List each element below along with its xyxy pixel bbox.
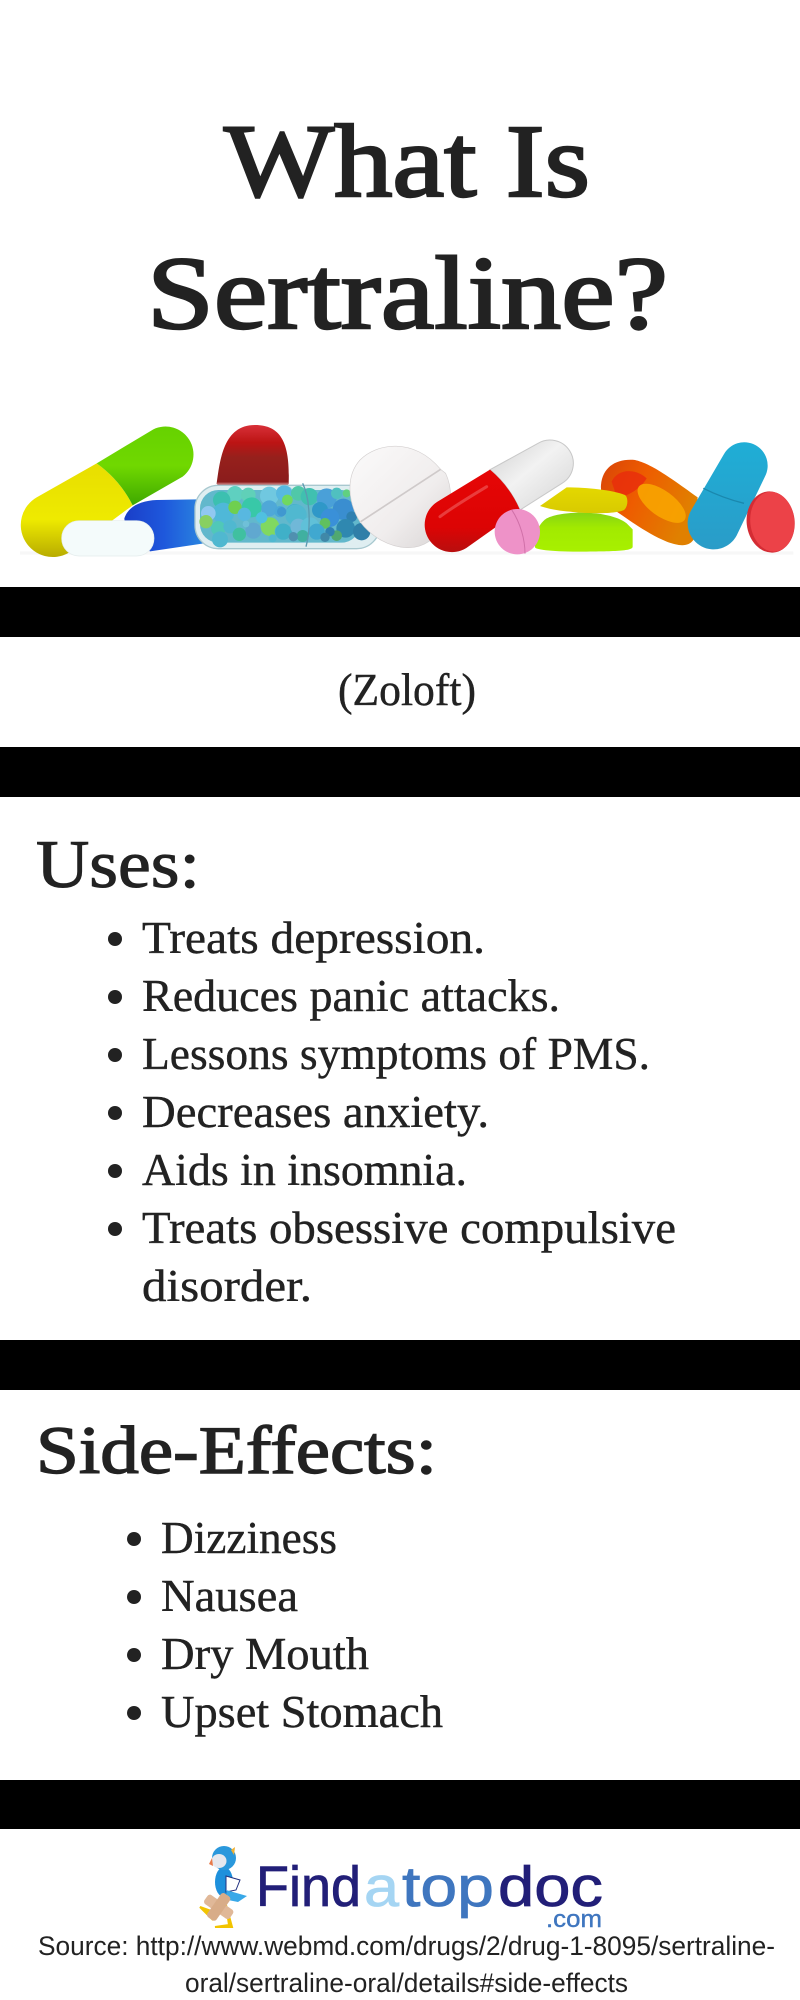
wordmark: doc (498, 1855, 603, 1919)
side effects list: Upset Stomach (161, 1687, 443, 1737)
illustration: row of colourful pills (20, 425, 798, 557)
glass capsule with beads (195, 483, 380, 549)
pink tablet (495, 509, 540, 554)
source text (38, 1931, 775, 1998)
ground shadow (20, 551, 793, 555)
black band 1 (0, 587, 800, 637)
uses list (108, 913, 676, 1311)
black band 3 (0, 1340, 800, 1390)
side effects list: Dizziness (161, 1513, 337, 1563)
source text: oral/sertraline-oral/details#side-effects (185, 1968, 628, 1998)
red tablet (744, 489, 798, 555)
heading: side effects: Side-Effects: (36, 1412, 437, 1488)
panel: uses (36, 826, 676, 1311)
black band 4 (0, 1780, 800, 1829)
red and white capsule (425, 440, 573, 552)
subtitle: Zoloft: (Zoloft) (338, 665, 476, 715)
white round tablet (350, 446, 451, 548)
wordmark: .com (546, 1906, 602, 1933)
orange softgel capsule (601, 460, 698, 545)
heading: uses: Uses: (36, 826, 200, 902)
green disc (535, 513, 633, 552)
wordmark: top (402, 1855, 494, 1919)
title: Sertraline? (147, 236, 668, 351)
uses list: Decreases anxiety. (142, 1087, 489, 1137)
light blue capsule (688, 442, 768, 549)
uses list: Aids in insomnia. (142, 1145, 467, 1195)
logo: Findatopdoc (198, 1846, 603, 1933)
black band 2 (0, 747, 800, 797)
white oblong pill (62, 521, 154, 556)
yellow-green capsule (21, 427, 193, 557)
uses list: Treats obsessive compulsive (142, 1203, 676, 1253)
icon: duck mascot (198, 1846, 247, 1928)
wordmark (256, 1855, 603, 1933)
side effects list: Nausea (161, 1571, 298, 1621)
dark red capsule (217, 425, 289, 484)
uses list: Reduces panic attacks. (142, 971, 560, 1021)
source text: Source: http://www.webmd.com/drugs/2/drug-1-8095/sertraline- (38, 1931, 775, 1961)
yellow disc (540, 487, 627, 513)
blue capsule (124, 499, 204, 551)
title: What Is (224, 104, 590, 219)
panel: side effects (36, 1412, 443, 1737)
wordmark: a (364, 1855, 399, 1919)
wordmark: Find (256, 1855, 361, 1919)
title (147, 104, 668, 351)
side effects list: Dry Mouth (161, 1629, 369, 1679)
uses list: Lessons symptoms of PMS. (142, 1029, 650, 1079)
side effects list (127, 1513, 443, 1737)
uses list: Treats depression. (142, 913, 485, 963)
uses list: disorder. (142, 1261, 312, 1311)
